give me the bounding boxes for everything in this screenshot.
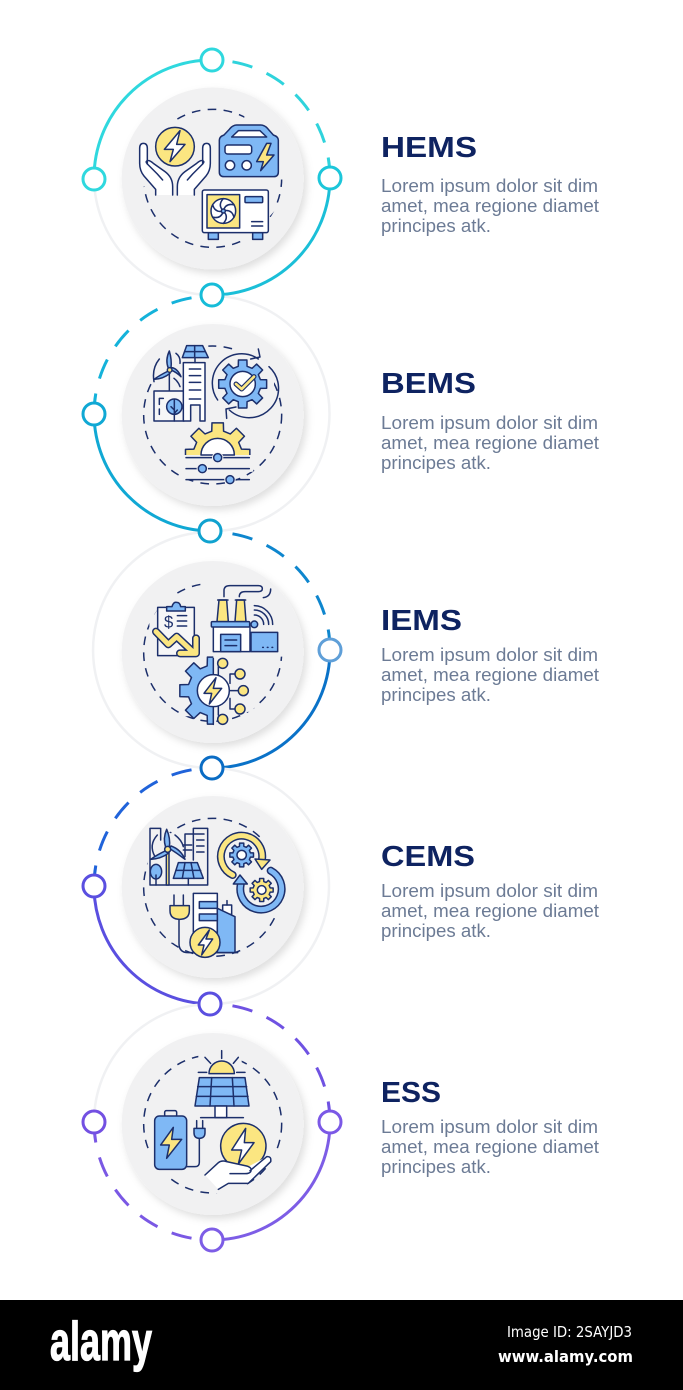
- disc: [122, 88, 304, 270]
- panel: BEMS: [94, 296, 599, 531]
- text block: amet, mea regione diamet: [381, 901, 599, 921]
- text block: Lorem ipsum dolor sit dim: [381, 881, 598, 901]
- disc: [122, 324, 304, 506]
- panel: HEMS: [94, 60, 599, 295]
- ring dashes: upper left: [94, 768, 212, 886]
- ring arc: lower left: [94, 414, 210, 531]
- ring arc: lower left: [94, 886, 210, 1004]
- icon: circular gears: [221, 836, 282, 910]
- icon: factory with wireless signal: [211, 586, 278, 652]
- text block: amet, mea regione diamet: [381, 1137, 599, 1157]
- text block: amet, mea regione diamet: [381, 433, 599, 453]
- text block: principes atk.: [381, 453, 491, 473]
- text block: principes atk.: [381, 216, 491, 236]
- ring dashes: lower left: [94, 1122, 212, 1240]
- footer logo: alamy: [50, 1310, 152, 1372]
- heading: HEMS: [381, 132, 477, 164]
- text block: principes atk.: [381, 1157, 491, 1177]
- ring arc: lower right: [212, 178, 330, 295]
- icon: half gear with sliders: [185, 423, 250, 487]
- icon: air conditioner: [202, 190, 268, 239]
- icon: smart building, gear, sliders: [144, 342, 282, 487]
- disc: [122, 1033, 304, 1215]
- icon: gear with check mark: [212, 349, 279, 418]
- text block: Lorem ipsum dolor sit dim: [381, 413, 598, 433]
- text block: amet, mea regione diamet: [381, 196, 599, 216]
- image id: Image ID: 2SAYJD3: [507, 1323, 632, 1341]
- icon: solar panel, battery, hand with energy: [142, 1050, 283, 1198]
- text block: [381, 645, 599, 705]
- icon: portable power station: [219, 125, 278, 177]
- icon: hands with energy: [140, 127, 210, 195]
- text block: [381, 881, 599, 941]
- pale ring segment: [212, 296, 330, 531]
- panel: CEMS: [94, 768, 599, 1004]
- icon: sun and solar panel: [195, 1051, 249, 1118]
- heading: ESS: [381, 1077, 441, 1109]
- ring dashes: upper left: [94, 296, 212, 414]
- icon: plug, building and bolt: [170, 893, 238, 957]
- icon: renewable city, gears, plug building: [144, 818, 288, 957]
- text block: principes atk.: [381, 685, 491, 705]
- text block: Lorem ipsum dolor sit dim: [381, 645, 598, 665]
- text block: amet, mea regione diamet: [381, 665, 599, 685]
- disc: [122, 796, 304, 978]
- pale ring segment: [93, 532, 212, 768]
- icon: invoice with falling arrow: $: [164, 613, 173, 632]
- icon: wind turbine, tree, solar panel and buildings: [150, 828, 208, 885]
- text block: [381, 176, 599, 236]
- text block: Lorem ipsum dolor sit dim: [381, 1117, 598, 1137]
- text block: principes atk.: [381, 921, 491, 941]
- ring arc: lower right: [212, 650, 330, 768]
- text block: Lorem ipsum dolor sit dim: [381, 176, 598, 196]
- heading: BEMS: [381, 368, 476, 400]
- footer bar: [0, 1300, 683, 1390]
- panel: ESS: [94, 1004, 599, 1240]
- ring dashes: upper right: [212, 60, 330, 178]
- pale ring segment: [94, 178, 212, 295]
- ring dashes: upper right: [212, 1004, 330, 1122]
- heading: CEMS: [381, 841, 475, 873]
- ring arc: upper left: [94, 60, 212, 178]
- text block: [381, 413, 599, 473]
- text block: [381, 1117, 599, 1177]
- heading: IEMS: [381, 605, 462, 637]
- panel: IEMS: [93, 532, 599, 768]
- icon: finance chart, factory, bolt gear: [144, 580, 285, 724]
- pale ring segment: [94, 1004, 210, 1122]
- icon: battery with plug: [155, 1111, 205, 1169]
- icon: gear with bolt and nodes: [180, 657, 248, 724]
- website: www.alamy.com: [498, 1347, 633, 1366]
- icon: invoice with falling arrow: [156, 602, 196, 656]
- icon: hand holding energy: [205, 1123, 271, 1189]
- icon: hands, power station, air conditioner: [138, 108, 287, 247]
- disc: [122, 561, 304, 743]
- pale ring segment: [210, 768, 329, 1004]
- ring dashes: upper right: [212, 532, 330, 650]
- connector nodes: [83, 49, 341, 1251]
- ring arc: lower right: [212, 1122, 330, 1240]
- icon: building with turbine and solar panel: [153, 346, 208, 421]
